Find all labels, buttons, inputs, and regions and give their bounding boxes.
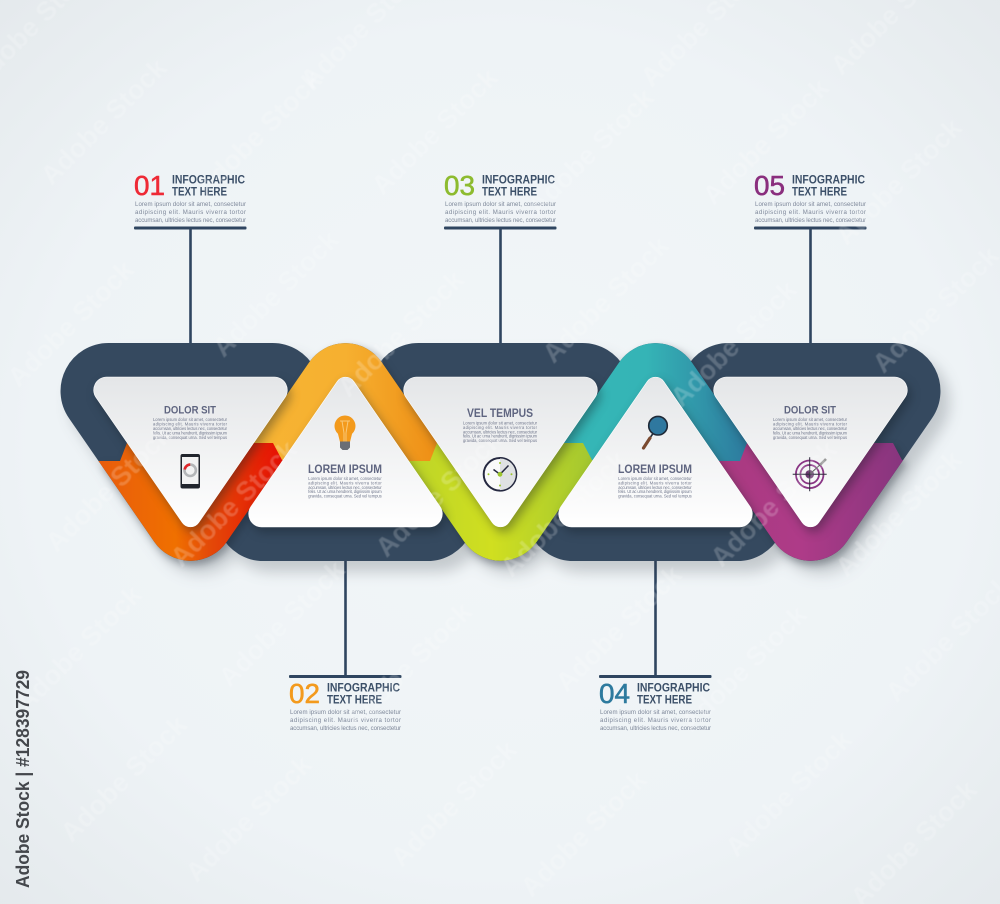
ribbon chain	[66, 360, 936, 544]
panel text: vel tempus: accumsan, ultricies lectus nec, consectetur	[463, 429, 538, 434]
panel text: lorem ipsum 2: gravida, consequat urna. Sed vel tempus	[618, 494, 692, 499]
white triangle panels	[94, 377, 907, 527]
dark triangle frames	[78, 360, 923, 544]
step 01: INFOGRAPHIC	[172, 174, 246, 186]
panel text: dolor sit 1	[153, 404, 228, 440]
watermark text: Adobe Stock	[332, 264, 470, 403]
panel text: vel tempus: Lorem ipsum dolor sit amet, consectetur	[463, 420, 538, 426]
watermark text: Adobe Stock	[830, 444, 968, 583]
watermark text: Adobe Stock	[370, 424, 508, 563]
watermark text: Adobe Stock	[705, 434, 843, 573]
watermark text: Adobe Stock	[550, 559, 688, 698]
panel text: dolor sit 1: Lorem ipsum dolor sit amet, consectetur	[153, 417, 228, 422]
panel text: lorem ipsum 1: felis. Ut ac urna hendrerit, dignissim ipsum	[308, 489, 382, 494]
step 03: accumsan, ultricies lectus nec, consectetur	[445, 217, 556, 224]
watermark text: Adobe Stock	[720, 724, 858, 863]
panel text: dolor sit 2: gravida, consequat urna. Sed vel tempus	[773, 435, 847, 440]
step 04: adipiscing elit. Mauris viverra tortor	[600, 717, 711, 724]
panel text: vel tempus: felis. Ut ac urna hendrerit, dignissim ipsum	[463, 434, 538, 439]
panel text: dolor sit 2: adipiscing elit. Mauris viverra tortor	[773, 422, 848, 426]
step 05: 05	[754, 170, 785, 201]
coloured ribbon	[66, 360, 936, 544]
panel text: lorem ipsum 2: Lorem ipsum dolor sit amet, consectetur	[618, 476, 692, 481]
watermark text: Adobe Stock	[385, 734, 523, 873]
step 03: TEXT HERE	[482, 186, 537, 198]
icon: light bulb	[334, 416, 356, 450]
step 04	[599, 675, 712, 732]
panel text: lorem ipsum 1	[308, 462, 382, 499]
step 05: accumsan, ultricies lectus nec, consectetur	[755, 217, 866, 224]
watermark text: Adobe Stock	[213, 554, 351, 693]
watermark text: Adobe Stock	[366, 62, 504, 201]
panel text: lorem ipsum 1: accumsan, ultricies lectus nec, consectetur	[308, 485, 382, 490]
step 04: accumsan, ultricies lectus nec, consectetur	[600, 725, 711, 732]
step 05: adipiscing elit. Mauris viverra tortor	[755, 209, 866, 216]
panel text: dolor sit 2: DOLOR SIT	[784, 404, 836, 416]
panel text: dolor sit 2: Lorem ipsum dolor sit amet, consectetur	[773, 417, 848, 422]
panel text: lorem ipsum 2: adipiscing elit. Mauris viverra tortor	[618, 480, 692, 485]
step 03: INFOGRAPHIC	[482, 174, 556, 186]
watermark text: Adobe Stock	[10, 579, 148, 718]
step 05: TEXT HERE	[792, 186, 847, 198]
panel text: lorem ipsum 1: adipiscing elit. Mauris viverra tortor	[308, 480, 382, 485]
panel text: dolor sit 1: felis. Ut ac urna hendrerit, dignissim ipsum	[153, 430, 228, 436]
watermark text: Adobe Stock	[830, 112, 968, 251]
panel text: dolor sit 1: DOLOR SIT	[164, 404, 216, 416]
panel text: lorem ipsum 2: accumsan, ultricies lectus nec, consectetur	[618, 485, 692, 490]
watermark text: Adobe Stock	[522, 82, 660, 221]
watermark text: Adobe Stock	[495, 444, 633, 583]
step 04: TEXT HERE	[637, 694, 692, 706]
icon: clock	[484, 458, 516, 491]
step 02: Lorem ipsum dolor sit amet, consectetur	[290, 709, 401, 716]
panel text: lorem ipsum 1: LOREM IPSUM	[308, 462, 382, 476]
step 03: Lorem ipsum dolor sit amet, consectetur	[445, 201, 556, 208]
step 03	[444, 170, 556, 230]
panel text: dolor sit 1: gravida, consequat urna. Sed vel tempus	[153, 435, 227, 440]
step 03: 03	[444, 170, 475, 201]
step 02: accumsan, ultricies lectus nec, consectetur	[290, 725, 401, 732]
icon: target	[793, 457, 827, 491]
step 02: TEXT HERE	[327, 694, 382, 706]
panel text: vel tempus: gravida, consequat urna. Sed vel tempus	[463, 438, 537, 443]
step 05: INFOGRAPHIC	[792, 174, 866, 186]
panel text: dolor sit 1: accumsan, ultricies lectus nec, consectetur	[153, 426, 228, 431]
watermark text: Adobe Stock	[675, 599, 813, 738]
panel text: dolor sit 1: adipiscing elit. Mauris viverra tortor	[153, 422, 228, 426]
step 01: 01	[134, 170, 165, 201]
watermark text: Adobe Stock	[180, 749, 318, 888]
panel text: vel tempus	[463, 408, 538, 443]
panel text: lorem ipsum 2	[618, 462, 692, 499]
step 04: INFOGRAPHIC	[637, 682, 711, 694]
step 05: Lorem ipsum dolor sit amet, consectetur	[755, 201, 866, 208]
icon: magnifier	[644, 416, 667, 448]
step 01: adipiscing elit. Mauris viverra tortor	[135, 209, 246, 216]
panel text: vel tempus: VEL TEMPUS	[467, 408, 533, 420]
stock id label: Adobe Stock | #128397729	[13, 670, 33, 888]
connector stems	[190, 228, 810, 676]
panel text: dolor sit 2	[773, 404, 848, 440]
watermark text: Adobe Stock	[190, 64, 328, 203]
step 02: adipiscing elit. Mauris viverra tortor	[290, 717, 401, 724]
watermark text: Adobe Stock	[207, 224, 345, 363]
watermark text: Adobe Stock	[537, 230, 675, 369]
step 01: Lorem ipsum dolor sit amet, consectetur	[135, 201, 246, 208]
panel text: dolor sit 2: accumsan, ultricies lectus nec, consectetur	[773, 426, 848, 431]
watermark text: Adobe Stock	[165, 434, 303, 573]
step 04: 04	[599, 678, 630, 709]
watermark text: Adobe Stock	[665, 274, 803, 413]
step 02: INFOGRAPHIC	[327, 682, 401, 694]
step 02	[289, 675, 402, 732]
panel text: lorem ipsum 1: Lorem ipsum dolor sit amet, consectetur	[308, 476, 382, 481]
step 05	[754, 170, 866, 230]
watermark text: Adobe Stock	[697, 72, 835, 211]
panel text: vel tempus: adipiscing elit. Mauris viverra tortor	[463, 425, 538, 430]
step 04: Lorem ipsum dolor sit amet, consectetur	[600, 709, 711, 716]
panel text: lorem ipsum 2: LOREM IPSUM	[618, 462, 692, 476]
step 01	[134, 170, 246, 230]
step 02: 02	[289, 678, 320, 709]
watermark text: Adobe Stock	[2, 254, 140, 393]
panel text: dolor sit 2: felis. Ut ac urna hendrerit, dignissim ipsum	[773, 430, 848, 436]
watermark text: Adobe Stock	[340, 596, 478, 735]
icon: smartphone	[180, 454, 200, 488]
watermark text: Adobe Stock	[40, 419, 178, 558]
watermark text: Adobe Stock	[515, 764, 653, 903]
watermark text: Adobe Stock	[55, 709, 193, 848]
panel text: lorem ipsum 2: felis. Ut ac urna hendrerit, dignissim ipsum	[618, 489, 692, 494]
panel text: lorem ipsum 1: gravida, consequat urna. Sed vel tempus	[308, 494, 382, 499]
watermark text: Adobe Stock	[35, 52, 173, 191]
step 03: adipiscing elit. Mauris viverra tortor	[445, 209, 556, 216]
step 01: TEXT HERE	[172, 186, 227, 198]
step 01: accumsan, ultricies lectus nec, consectetur	[135, 217, 246, 224]
